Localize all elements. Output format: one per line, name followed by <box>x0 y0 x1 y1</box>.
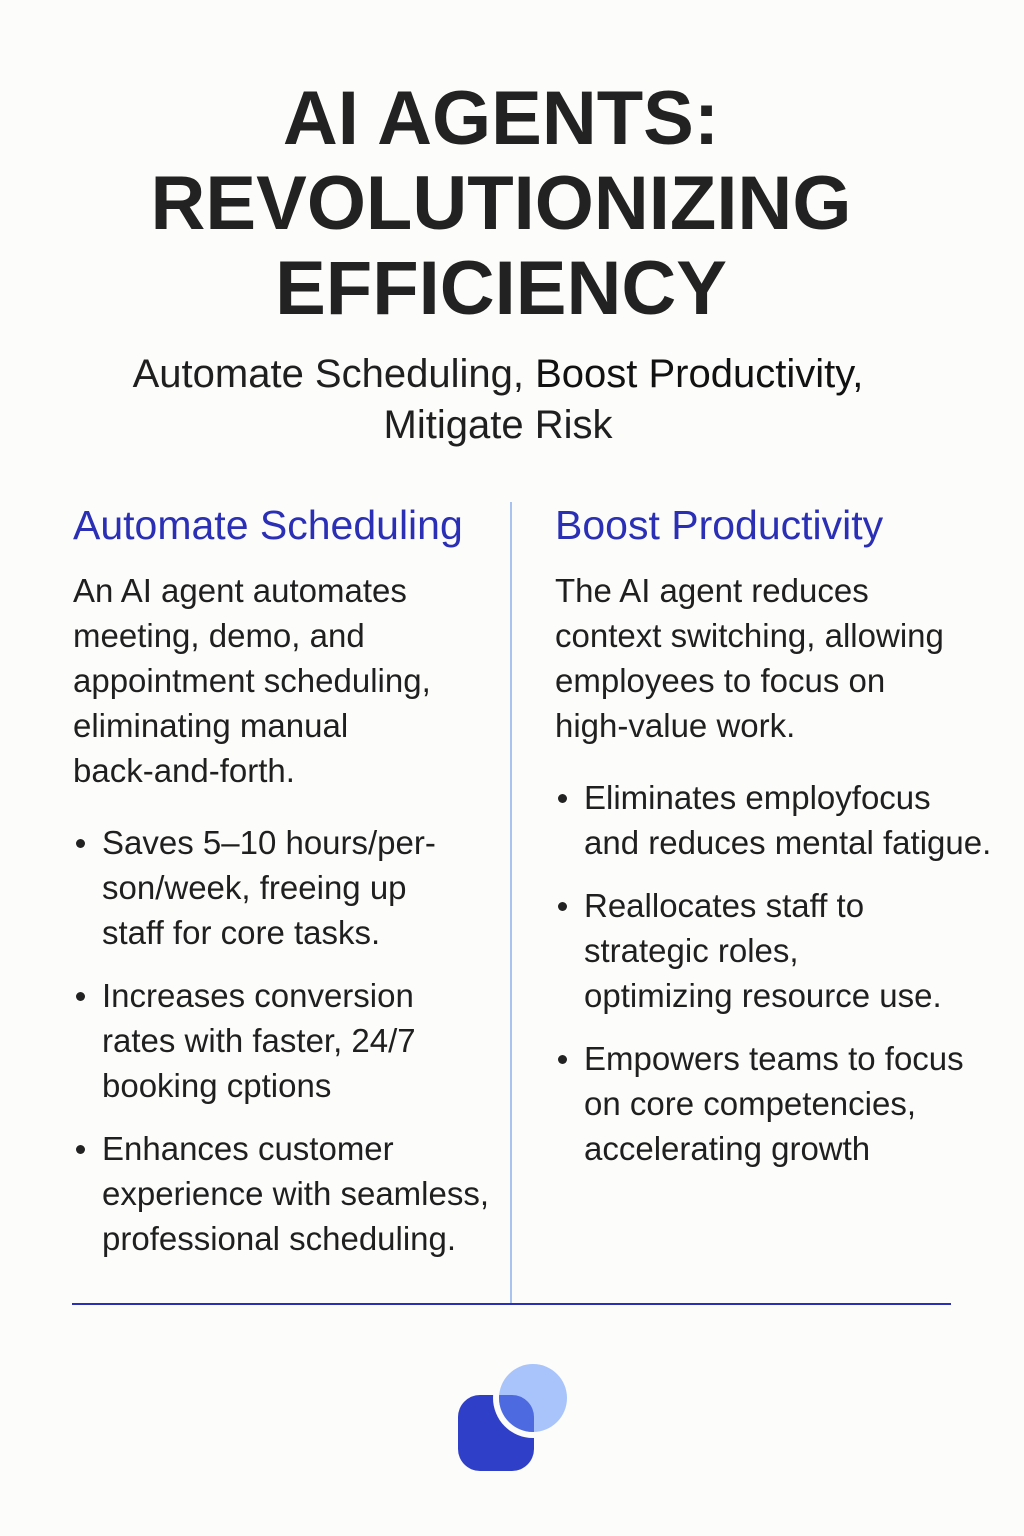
subtitle <box>132 352 863 447</box>
panel: boost productivity <box>555 502 991 1167</box>
subtitle: Automate Scheduling, Boost Productivity, <box>133 352 863 396</box>
list: automate bullets <box>76 824 489 1257</box>
title: REVOLUTIONIZING <box>151 161 851 246</box>
list: automate bullets: experience with seamless, <box>102 1175 489 1212</box>
list: automate bullets: Increases conversion <box>102 977 414 1014</box>
list: automate bullets: son/week, freeing up <box>102 869 407 906</box>
text: automate description <box>73 572 431 789</box>
list: automate bullets: professional scheduling. <box>102 1220 456 1257</box>
list: productivity bullets: on core competencies, <box>584 1085 916 1122</box>
list: productivity bullets: and reduces mental fatigue. <box>584 824 991 861</box>
list: productivity bullets: accelerating growth <box>584 1130 870 1167</box>
text: automate description: back-and-forth. <box>73 752 295 789</box>
list: automate bullets: staff for core tasks. <box>102 914 380 951</box>
title: EFFICIENCY <box>275 246 727 331</box>
heading: automate scheduling: Automate Scheduling <box>73 502 463 548</box>
list: productivity bullets: optimizing resource use. <box>584 977 942 1014</box>
list: automate bullets: Saves 5–10 hours/per- <box>102 824 436 861</box>
subtitle: Mitigate Risk <box>384 403 612 447</box>
title <box>151 76 851 331</box>
list: productivity bullets: Empowers teams to focus <box>584 1040 964 1077</box>
divider vertical <box>510 502 512 1304</box>
text: automate description: An AI agent automates <box>73 572 407 609</box>
list: productivity bullets: Eliminates employfocus <box>584 779 931 816</box>
text: automate description: eliminating manual <box>73 707 348 744</box>
text: productivity description: high-value work. <box>555 707 795 744</box>
text: productivity description: context switching, allowing <box>555 617 944 654</box>
list: productivity bullets: Reallocates staff to <box>584 887 864 924</box>
list: productivity bullets <box>558 779 991 1167</box>
text: productivity description <box>555 572 944 744</box>
bottom rule <box>72 1303 951 1305</box>
list: automate bullets: Enhances customer <box>102 1130 394 1167</box>
list: automate bullets: booking cptions <box>102 1067 331 1104</box>
text: automate description: meeting, demo, and <box>73 617 365 654</box>
text: productivity description: The AI agent reduces <box>555 572 869 609</box>
list: productivity bullets: strategic roles, <box>584 932 799 969</box>
text: productivity description: employees to focus on <box>555 662 885 699</box>
icon: logo <box>458 1364 567 1471</box>
panel: automate scheduling <box>73 502 489 1257</box>
heading: boost productivity: Boost Productivity <box>555 502 883 548</box>
text: automate description: appointment scheduling, <box>73 662 431 699</box>
list: automate bullets: rates with faster, 24/7 <box>102 1022 416 1059</box>
title: AI AGENTS: <box>283 76 719 161</box>
